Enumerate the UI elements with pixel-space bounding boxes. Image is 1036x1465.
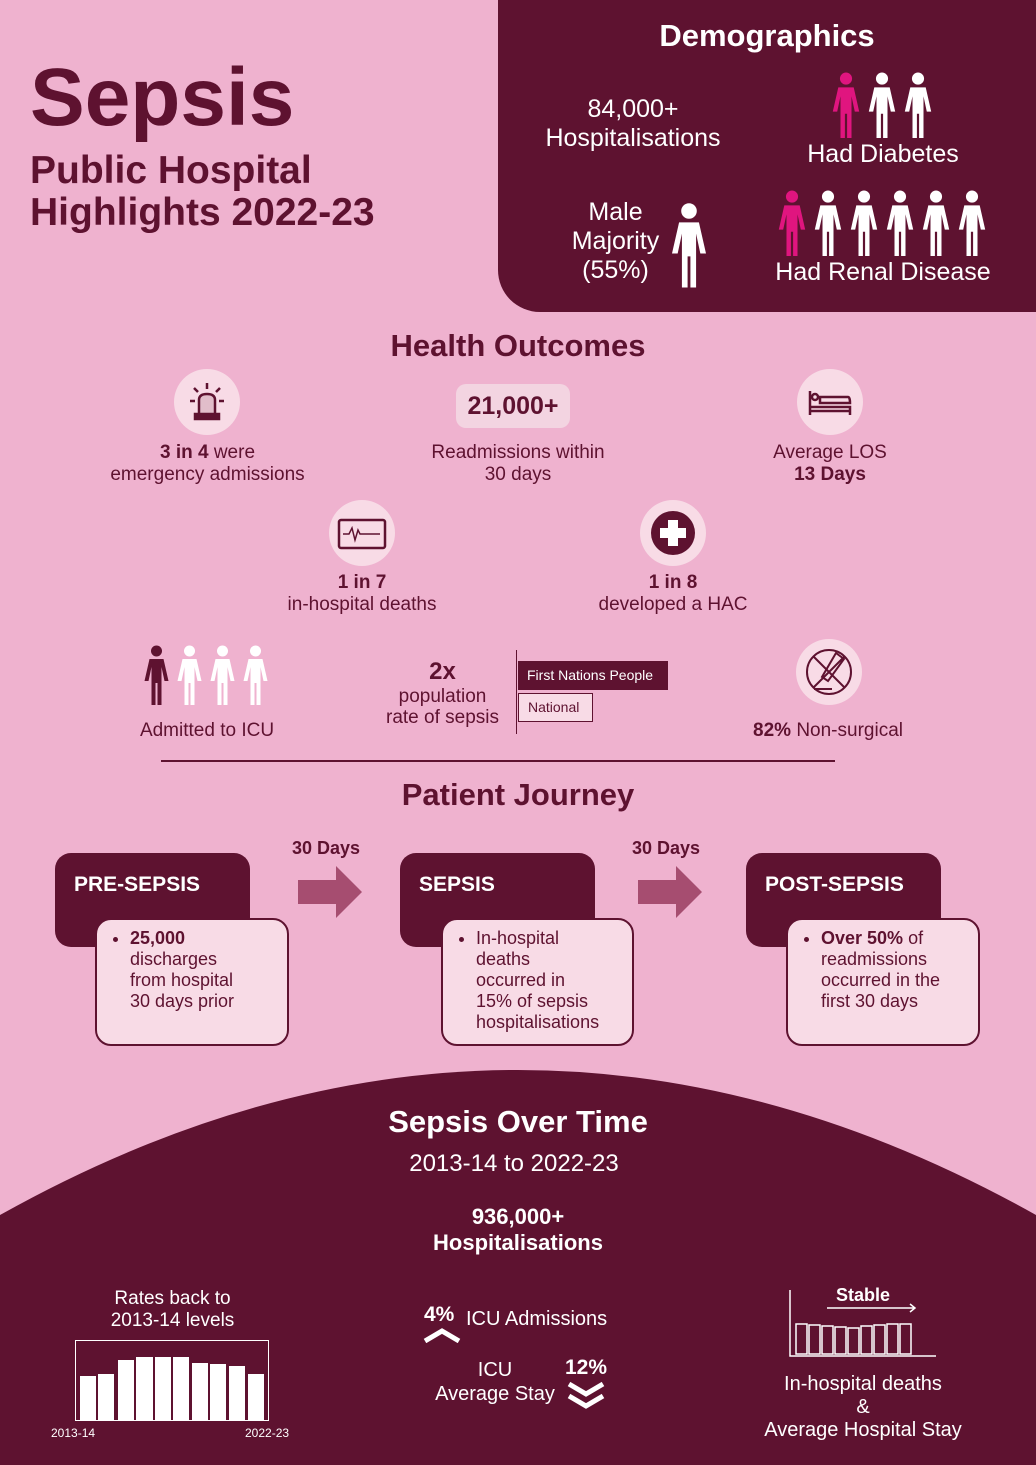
- chart: stable: [764, 1285, 962, 1441]
- icon: no surgery: [796, 639, 862, 705]
- text: LOS: Average LOS: [773, 442, 887, 463]
- title: [30, 52, 375, 234]
- stat: ICU admissions: 4%: [424, 1303, 454, 1326]
- chart: rates back to levels: 2013-14 levels: [111, 1310, 234, 1331]
- stat: renal: Had Renal Disease: [775, 258, 991, 286]
- panel: demographics: [498, 0, 1036, 312]
- text: ICU: Admitted to ICU: [140, 720, 274, 741]
- text: LOS: [773, 442, 887, 485]
- chart: rates back to levels: 2013-14: [51, 1426, 95, 1440]
- text: 2x population rate: 2x: [429, 658, 456, 685]
- panel: post-sepsis: Over 50% of readmissions occurred in the first 30 days: [821, 928, 940, 1011]
- heading: sepsis over time: Sepsis Over Time: [388, 1104, 648, 1139]
- text: emergency: emergency admissions: [110, 464, 305, 485]
- subheading: period: 2013-14 to 2022-23: [409, 1150, 619, 1177]
- text: 2x population rate: population: [399, 686, 486, 707]
- text: deaths: [288, 572, 436, 615]
- chart: rates back to levels: Rates back to: [114, 1288, 231, 1309]
- panel: pre-sepsis: [55, 853, 289, 1046]
- stat: readmissions: 21,000+: [467, 392, 559, 420]
- icon: medical cross: [640, 500, 706, 566]
- stat: ICU admissions: [424, 1303, 607, 1343]
- chart: stable: In-hospital deaths: [784, 1373, 942, 1395]
- stat: male majority: Majority: [572, 227, 659, 255]
- text: readmissions: Readmissions within: [431, 442, 605, 463]
- stat: male majority: [572, 198, 660, 284]
- text: HAC: [599, 572, 747, 615]
- icon: ICU people: [144, 646, 268, 705]
- stat: ICU average stay: 12%: [565, 1356, 607, 1379]
- bar chart: first nations vs national: [516, 650, 676, 734]
- stat: ICU average stay: Average Stay: [435, 1383, 555, 1405]
- chart: rates back to levels: [51, 1288, 289, 1440]
- stat: hospitalisations: Hospitalisations: [545, 124, 721, 152]
- panel: sepsis: SEPSIS: [419, 873, 495, 896]
- stat: ICU average stay: ICU: [478, 1359, 512, 1381]
- text: deaths: in-hospital deaths: [288, 594, 436, 615]
- title: Public Hospital: [30, 149, 312, 192]
- icon: renal people: [778, 190, 986, 256]
- chart: stable: &: [856, 1396, 870, 1418]
- stat: 936,000+: Hospitalisations: [433, 1230, 603, 1255]
- icon: diabetes people: [832, 72, 932, 138]
- panel: post-sepsis: [746, 853, 980, 1046]
- arrow 2: 30 Days: [632, 838, 700, 858]
- text: non-surgical: 82% Non-surgical: [753, 720, 903, 741]
- stat: ICU average stay: [435, 1356, 607, 1409]
- panel: sepsis: [400, 853, 634, 1046]
- text: HAC: developed a HAC: [599, 594, 747, 615]
- arrow 1: [292, 838, 362, 918]
- text: 2x population rate: [386, 658, 499, 728]
- text: emergency: 3 in 4 were: [160, 442, 255, 463]
- stat: male majority: (55%): [582, 256, 649, 284]
- chart: rates back to levels: 2022-23: [245, 1426, 289, 1440]
- stat: 936,000+: [433, 1204, 603, 1255]
- title: Highlights 2022-23: [30, 191, 375, 234]
- arrow 1: 30 Days: [292, 838, 360, 858]
- icon: bed: [797, 369, 863, 435]
- text: readmissions: 30 days: [485, 464, 551, 485]
- text: HAC: 1 in 8: [649, 572, 697, 593]
- text: LOS: 13 Days: [794, 464, 866, 485]
- arrow 2: [632, 838, 702, 918]
- stat: readmissions: [456, 384, 570, 428]
- stat: 936,000+: 936,000+: [472, 1204, 564, 1229]
- icon: siren: [174, 369, 240, 435]
- icon: male: [672, 203, 706, 288]
- text: emergency: [110, 442, 305, 485]
- panel: pre-sepsis: PRE-SEPSIS: [74, 873, 200, 896]
- heading: demographics: Demographics: [659, 18, 875, 53]
- text: readmissions: [431, 442, 605, 485]
- text: deaths: 1 in 7: [338, 572, 386, 593]
- heading: patient journey: Patient Journey: [402, 777, 634, 812]
- stat: hospitalisations: [545, 95, 721, 152]
- panel: post-sepsis: POST-SEPSIS: [765, 873, 904, 896]
- bar chart: first nations vs national: First Nations People: [527, 667, 653, 683]
- panel: sepsis: In-hospital deaths occurred in 15% of sepsis hospitalisations: [476, 928, 599, 1032]
- panel: pre-sepsis: 25,000 discharges from hospital 30 days prior: [130, 928, 234, 1011]
- heading: health outcomes: Health Outcomes: [391, 328, 645, 363]
- title: Sepsis: [30, 52, 294, 143]
- chart: stable: Stable: [836, 1285, 890, 1305]
- stat: male majority: Male: [588, 198, 643, 226]
- stat: hospitalisations: 84,000+: [587, 95, 679, 123]
- stat: ICU admissions: ICU Admissions: [466, 1308, 607, 1330]
- chart: stable: Average Hospital Stay: [764, 1419, 962, 1441]
- text: 2x population rate: rate of sepsis: [386, 707, 499, 728]
- icon: monitor: [329, 500, 395, 566]
- bar chart: first nations vs national: National: [528, 699, 579, 715]
- stat: diabetes: Had Diabetes: [807, 140, 959, 168]
